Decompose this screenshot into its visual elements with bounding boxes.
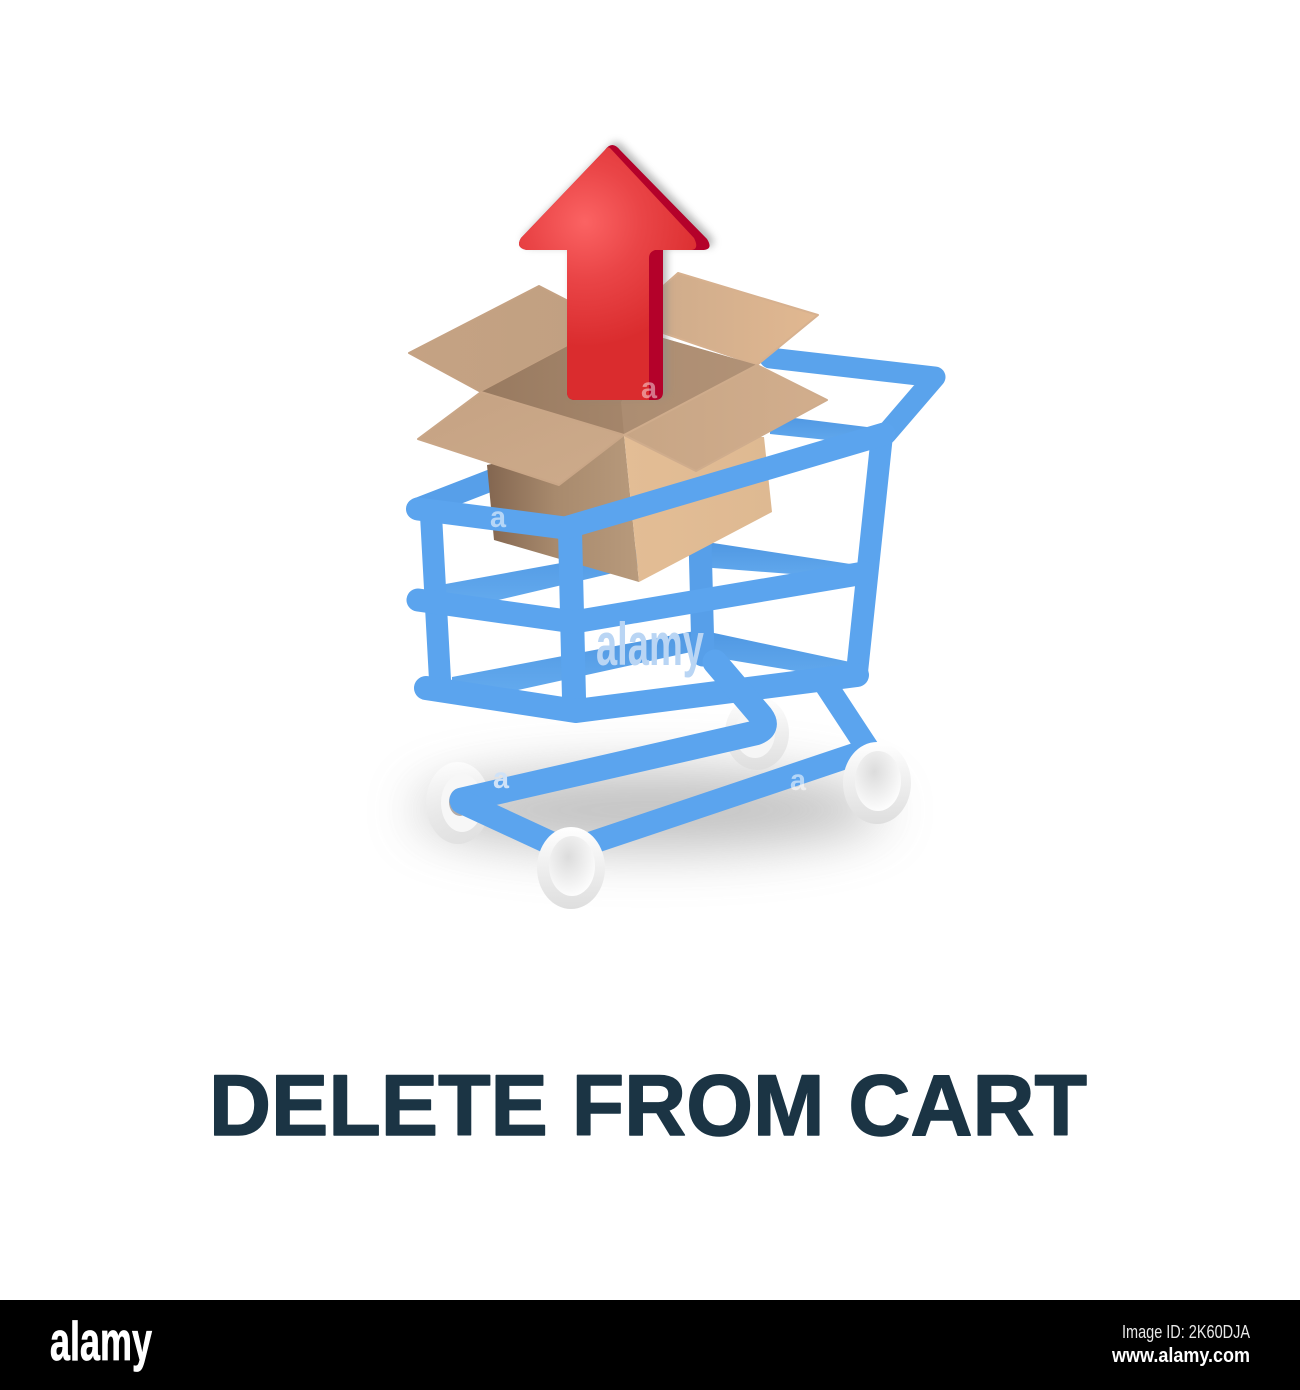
watermark glyphs: a [641, 372, 657, 405]
footer logo: alamy [50, 1310, 152, 1372]
image id: Image ID: 2K60DJA [1122, 1322, 1250, 1342]
title: DELETE FROM CART [209, 1058, 1087, 1154]
icon: shopping cart with box and arrow [409, 142, 935, 909]
watermark glyphs [490, 372, 806, 797]
front wheels [537, 742, 911, 909]
watermark glyphs: a [493, 762, 509, 795]
watermark glyphs: alamy [596, 611, 704, 678]
website: www.alamy.com [1111, 1345, 1250, 1367]
footer bar [0, 1300, 1300, 1390]
cart floor shadow [415, 770, 885, 850]
rear wheels [426, 696, 789, 844]
box sides [487, 435, 772, 582]
cart rear frame [417, 358, 935, 692]
box interior and back flaps [409, 273, 818, 435]
watermark glyphs: a [790, 764, 806, 797]
watermark glyphs: a [490, 501, 506, 534]
cart front frame [418, 434, 884, 711]
arrow [519, 142, 714, 400]
cart undercarriage [462, 662, 870, 852]
box front flaps [418, 365, 827, 485]
